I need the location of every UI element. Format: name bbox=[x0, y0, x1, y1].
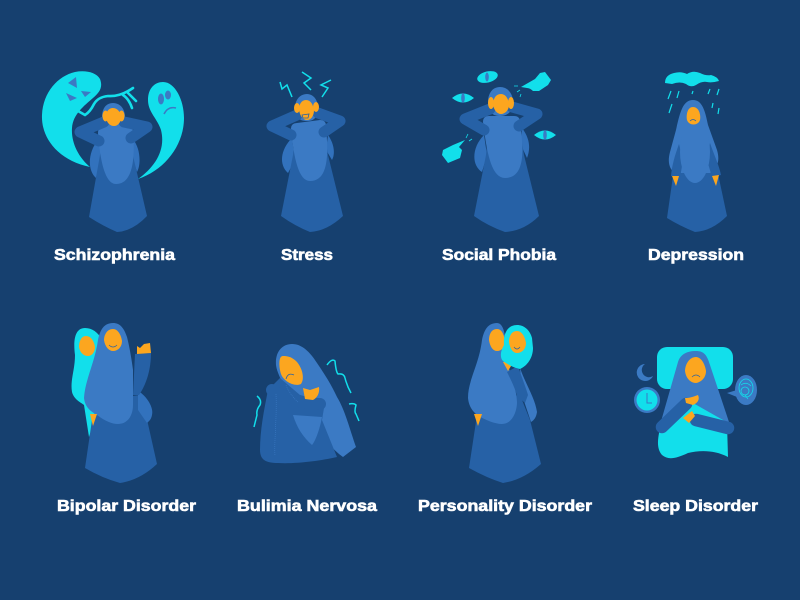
panel: depression bbox=[648, 72, 744, 264]
figure: woman holding head bbox=[80, 103, 147, 232]
figure: main woman bbox=[468, 323, 541, 483]
icon: motion ticks bbox=[466, 86, 521, 141]
panel: social phobia bbox=[442, 69, 556, 264]
figure: cyan mood figure bbox=[72, 328, 102, 437]
icon: pillow bbox=[657, 347, 733, 389]
figure: woman lying in bed bbox=[658, 351, 731, 458]
figure: cyan second personality bbox=[501, 325, 533, 369]
figure: crouching woman bbox=[260, 344, 356, 463]
label: Bipolar Disorder bbox=[57, 498, 196, 515]
figure: main woman bbox=[84, 323, 157, 483]
icon: pointing hand top bbox=[521, 72, 551, 91]
panel: stress bbox=[272, 72, 343, 264]
icon: branch bbox=[78, 88, 136, 115]
figure: woman holding head bbox=[465, 87, 539, 232]
figure: woman holding head bbox=[272, 94, 343, 232]
label: Personality Disorder bbox=[418, 498, 592, 515]
label: Schizophrenia bbox=[54, 247, 175, 264]
panel: personality disorder bbox=[418, 323, 592, 515]
icon: watching eyes bbox=[452, 69, 556, 140]
figure: woman in hood bbox=[667, 100, 727, 232]
panel: sleep disorder bbox=[633, 347, 758, 515]
label: Depression bbox=[648, 247, 744, 264]
label: Sleep Disorder bbox=[633, 498, 758, 515]
icon: right ghost bbox=[138, 82, 184, 179]
icon: tremor lines bbox=[254, 360, 359, 427]
icon: left ghost bbox=[42, 71, 101, 167]
icon: clock bbox=[634, 387, 660, 413]
panel: schizophrenia bbox=[42, 71, 184, 264]
label: Bulimia Nervosa bbox=[237, 498, 377, 515]
icon: thought bubble bbox=[727, 375, 757, 405]
icon: moon bbox=[637, 364, 653, 381]
icon: rain cloud bbox=[665, 72, 719, 114]
label: Stress bbox=[281, 247, 333, 264]
panel: bipolar disorder bbox=[57, 323, 196, 515]
icon: lightning lines bbox=[280, 72, 331, 97]
icon: pointing hand bottom bbox=[442, 140, 465, 163]
panel: bulimia nervosa bbox=[237, 344, 377, 515]
label: Social Phobia bbox=[442, 247, 556, 264]
